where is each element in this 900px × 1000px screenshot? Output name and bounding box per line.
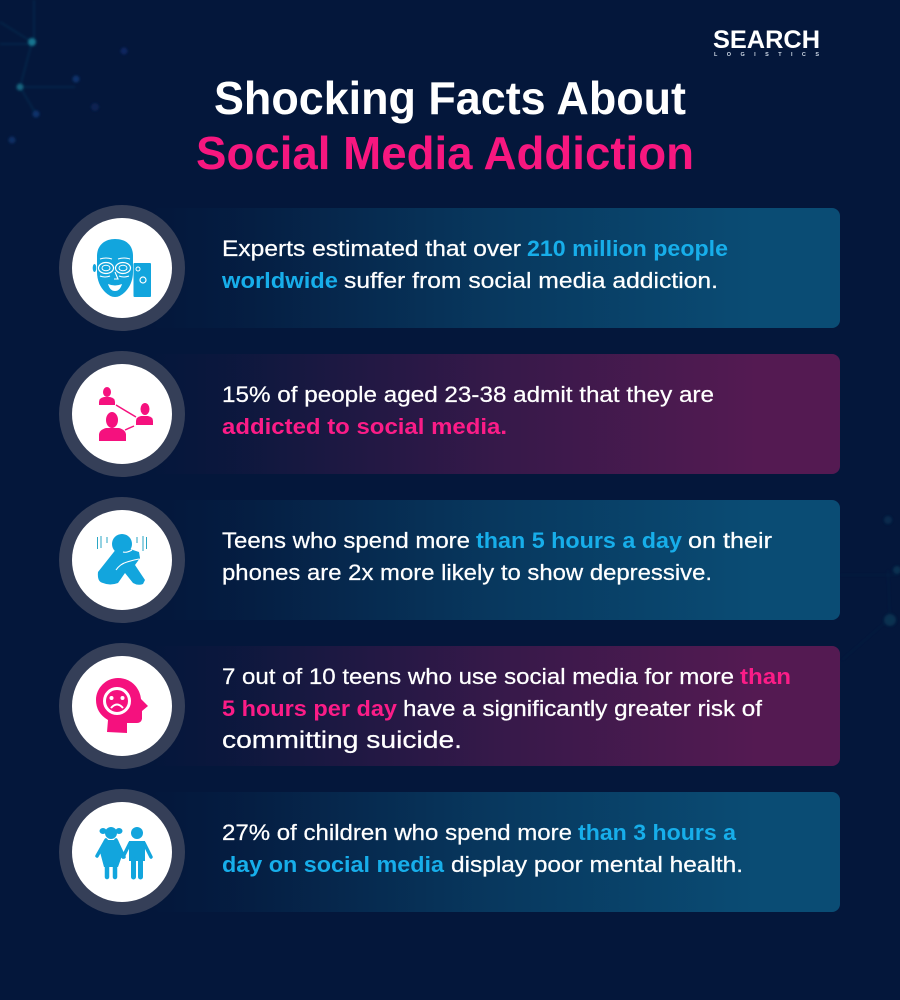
text: day on social media <box>222 852 445 877</box>
panel: teens 5 hours depressive <box>59 497 840 623</box>
text: than <box>740 664 791 689</box>
panel: 7 out of 10 teens <box>59 643 840 769</box>
text: than 5 hours a day <box>476 528 682 553</box>
title: Shocking Facts About <box>214 72 686 124</box>
network decoration: right <box>840 516 900 660</box>
badge <box>59 789 185 915</box>
badge <box>59 497 185 623</box>
icon: sitting sad person <box>98 534 146 585</box>
text <box>222 820 743 877</box>
badge <box>59 643 185 769</box>
text: worldwide <box>221 268 338 293</box>
title <box>196 72 694 179</box>
text: than 3 hours a <box>578 820 736 845</box>
network decoration: top left <box>0 0 128 144</box>
text <box>221 236 728 293</box>
text <box>222 382 714 439</box>
text <box>222 664 791 754</box>
icon: two children <box>97 827 151 877</box>
logo: LOGISTICS <box>714 52 819 58</box>
text: 7 out of 10 teens who use social media for more <box>222 664 734 689</box>
title: Social Media Addiction <box>196 127 694 179</box>
text: display poor mental health. <box>451 852 743 877</box>
text: 210 million people <box>527 236 728 261</box>
text: suffer from social media addiction. <box>344 268 718 293</box>
logo: SEARCH <box>713 26 820 54</box>
text: 27% of children who spend more <box>222 820 572 845</box>
badge <box>59 351 185 477</box>
badge <box>59 205 185 331</box>
icon: sad face in head <box>96 678 148 733</box>
text: Teens who spend more <box>222 528 470 553</box>
icon: face and phone <box>93 239 151 297</box>
panel: 210 million people <box>59 205 840 331</box>
icon: connected people <box>99 387 153 441</box>
panel: 27% of children <box>59 789 840 915</box>
text: Experts estimated that over <box>222 236 522 261</box>
text: committing suicide. <box>222 727 462 754</box>
text: addicted to social media. <box>222 414 507 439</box>
panel: 15% addicted <box>59 351 840 477</box>
text: have a significantly greater risk of <box>403 696 763 721</box>
text: 15% of people aged 23-38 admit that they are <box>222 382 714 407</box>
text: on their <box>688 528 773 553</box>
text <box>222 528 773 585</box>
text: phones are 2x more likely to show depressive. <box>222 560 712 585</box>
text: 5 hours per day <box>222 696 397 721</box>
